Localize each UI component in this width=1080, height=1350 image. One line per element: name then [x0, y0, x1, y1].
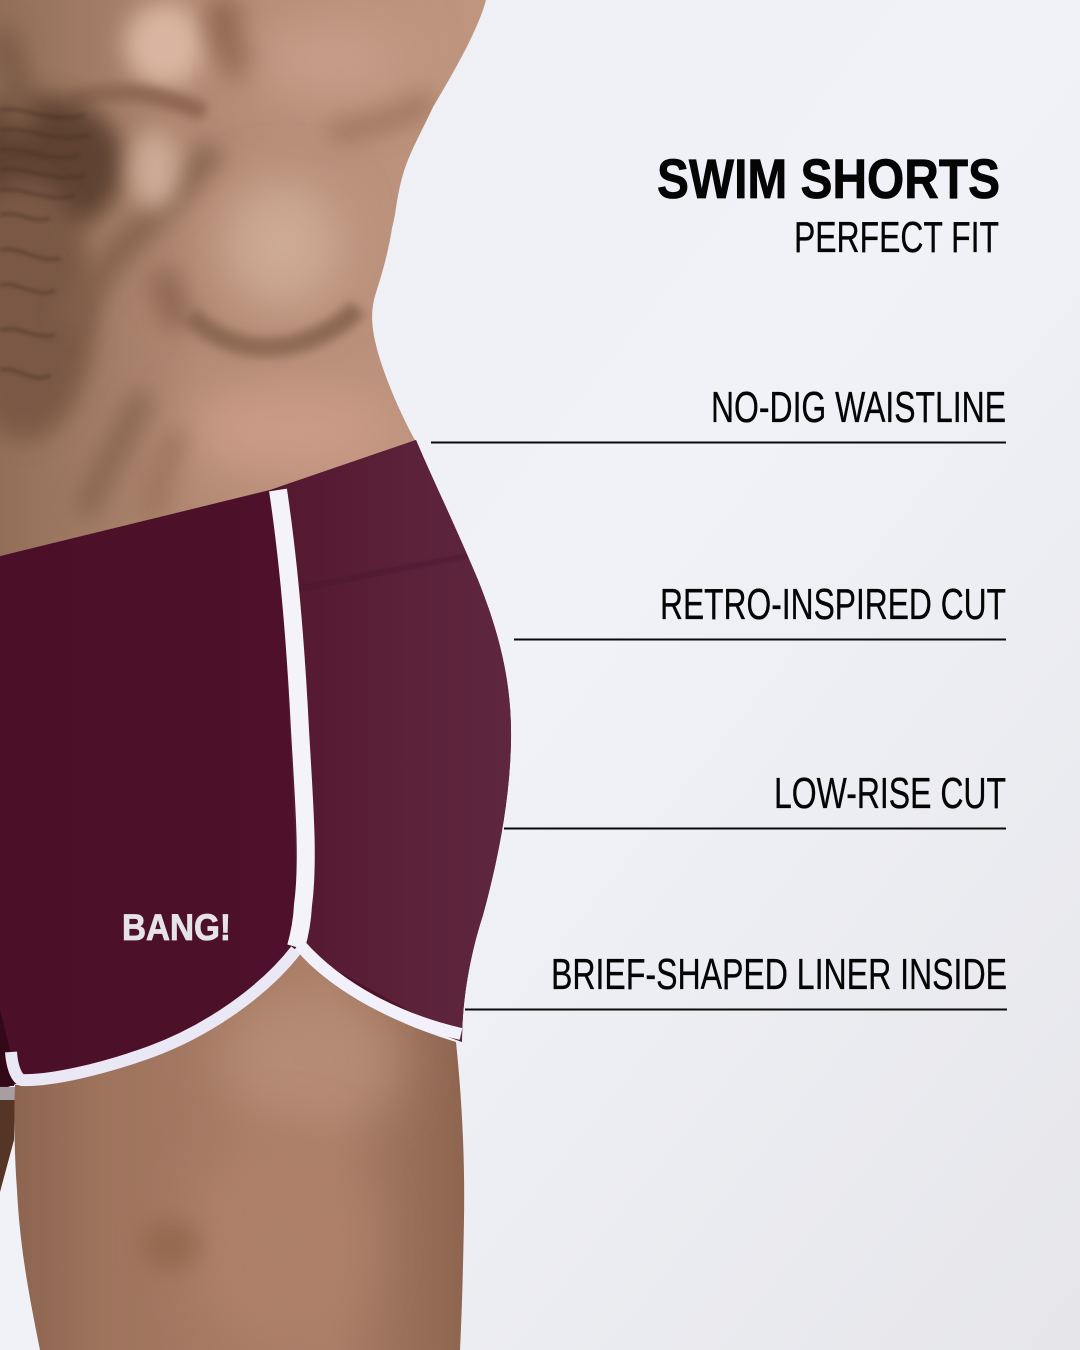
abdominal muscle highlight: [222, 180, 342, 310]
other leg sliver: [0, 1010, 15, 1192]
white piping trim: [11, 490, 461, 1080]
lower ab lines: [82, 395, 145, 515]
chest highlight: [125, 3, 205, 87]
title: SWIM SHORTS: [657, 147, 1000, 210]
ribs highlight: [250, 20, 410, 100]
waistband seam: [348, 554, 468, 578]
hair texture: [0, 109, 90, 378]
oblique diagonal crease: [92, 136, 229, 304]
pec crease: [70, 93, 205, 112]
thigh: [14, 950, 464, 1350]
abdominal lobe shadow: [190, 308, 358, 348]
sternum shadow: [224, 0, 250, 70]
lower abdomen glow: [185, 385, 395, 475]
torso photo area: [0, 0, 500, 560]
ribs shadow: [330, 100, 430, 130]
side panel: [278, 420, 520, 1050]
subtitle: PERFECT FIT: [794, 213, 999, 262]
logo: BANG!: BANG!: [122, 907, 231, 948]
swim shorts: [0, 420, 520, 1090]
chest hair: [0, 95, 125, 235]
